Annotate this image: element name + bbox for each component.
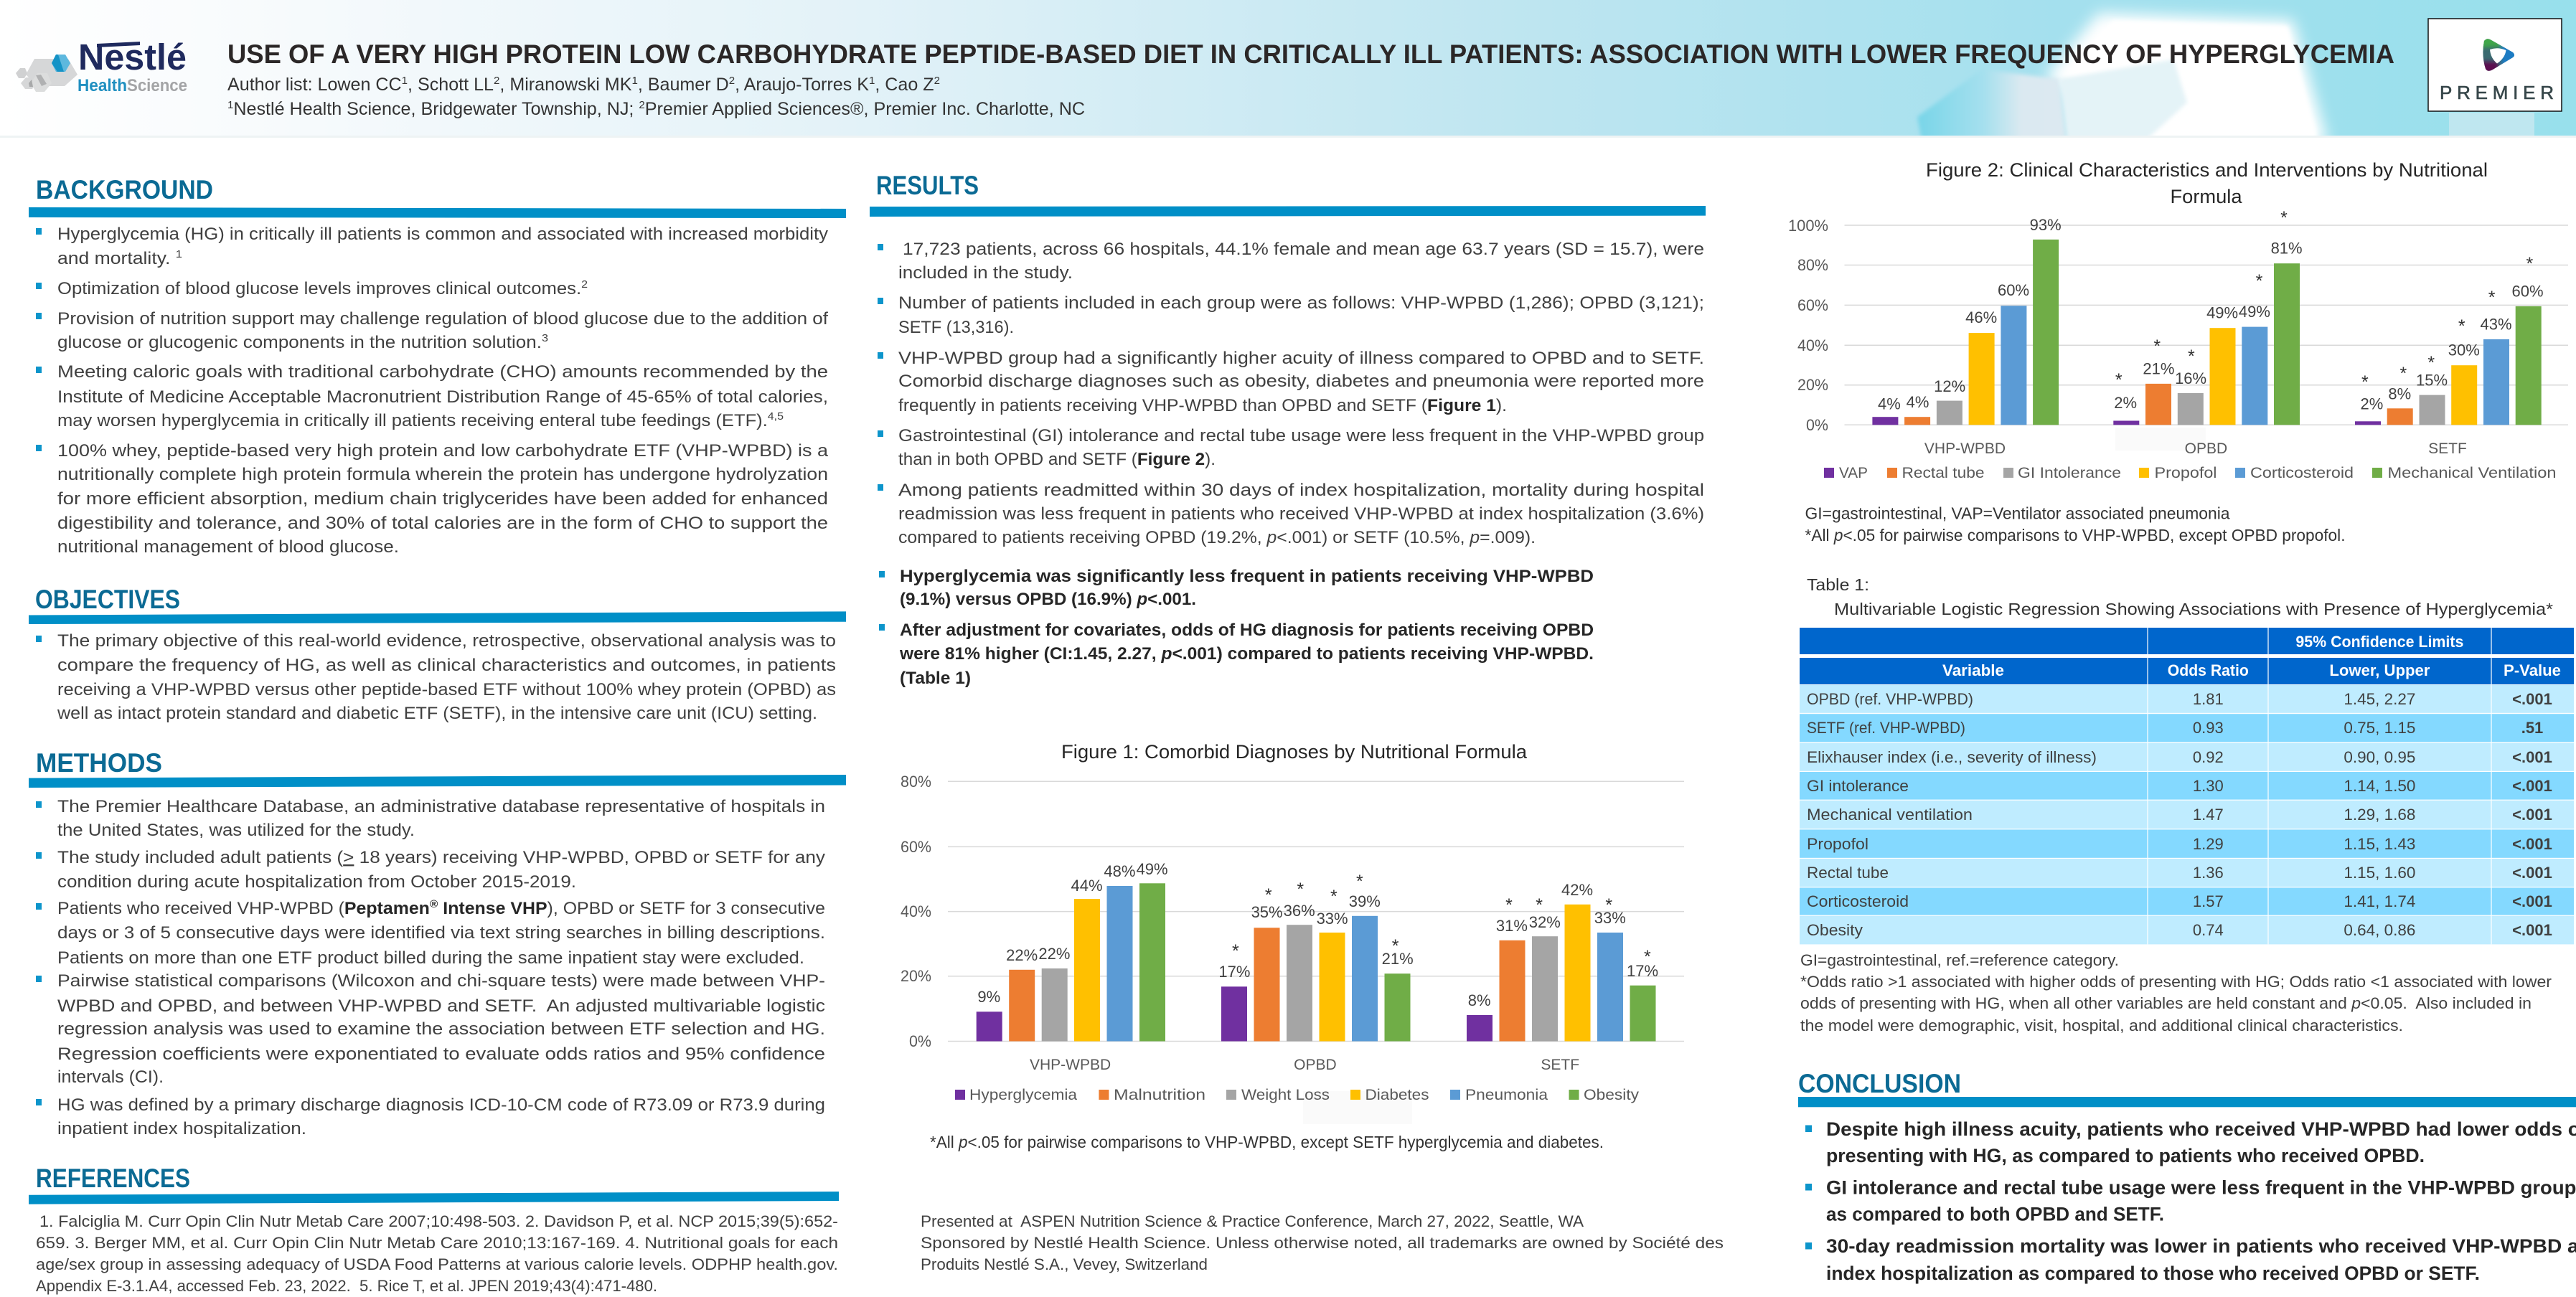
y axis labels [1788,217,1828,434]
conclusion bullet list: as compared to both OPBD and SETF. [1826,1204,2164,1225]
results bullet list: Gastrointestinal (GI) intolerance and rectal tube usage were less frequent in the VHP-WPBD group [898,426,1704,445]
table footnote [1800,951,2552,1034]
background bullet list: Optimization of blood glucose levels improves clinical outcomes. [57,279,547,298]
row: Elixhauser index [1807,748,2552,766]
significance asterisks: * [2458,316,2465,336]
row: Rectal tube: <.001 [2512,864,2552,882]
data labels: 22% [1038,945,1070,963]
data labels: 2% [2361,395,2383,413]
row: SETF: 0.75, 1.15 [2344,719,2415,737]
y axis labels: 20% [1797,376,1828,394]
row: OPBD: <.001 [2512,690,2552,708]
row: Rectal tube: Rectal tube [1807,864,1889,882]
reference list [36,1212,838,1295]
significance asterisks: * [1297,879,1304,900]
row: Mechanical ventilation: Mechanical ventilation [1807,806,1973,824]
author list: , Miranowski MK [499,75,632,95]
data labels: 60% [1998,281,2029,299]
row: OPBD: OPBD (ref. VHP-WPBD) [1807,690,1973,708]
legend: Mechanical Ventilation [2388,465,2556,481]
methods bullet list: ® [430,898,438,910]
background bullet list: 3 [542,332,548,344]
table header: P-Value [2504,661,2561,679]
data labels: 48% [1104,862,1135,880]
background bullet list: and mortality. [57,249,159,268]
bars: OPBD [1221,916,1411,1042]
objectives text: well as intact protein standard and diabetic ETF (SETF), in the intensive care unit (ICU) setting. [57,704,817,723]
y axis labels: 40% [901,902,931,920]
key findings: Hyperglycemia was significantly less frequent in patients receiving VHP-WPBD [900,567,1594,586]
methods bullet list: days or 3 of 5 consecutive days were identified via text string searches in billing descriptions. [57,923,825,943]
significance asterisks: * [1232,941,1239,961]
chart title: figure 1: Figure 1: Comorbid Diagnoses by Nutritional Formula [1061,741,1528,763]
methods bullet list [36,797,825,1138]
y axis labels: 0% [1806,416,1828,434]
row: Corticosteroid [1807,892,2552,910]
table 1: logistic regression [1800,628,2574,944]
row: Propofol: 1.15, 1.43 [2344,835,2415,853]
significance asterisks: * [2115,370,2123,390]
conclusion bullet list: presenting with HG, as compared to patients who received OPBD. [1826,1145,2425,1166]
table header: Variable [1942,661,2004,679]
legend: Obesity [1584,1087,1640,1103]
affiliations: Nestlé Health Science, Bridgewater Township, NJ; [233,99,639,119]
significance asterisks [2115,208,2534,392]
data labels: 35% [1251,903,1283,921]
y axis labels: 60% [901,838,931,856]
results bullet list: SETF (13,316). [898,318,1014,337]
objectives text: compare the frequency of HG, as well as clinical characteristics and outcomes, in patients [57,656,836,675]
table footnote: *Odds ratio >1 associated with higher odds of presenting with HG; Odds ratio <1 associated with lower [1800,973,2552,991]
results bullet list: included in the study. [898,263,1073,283]
background bullet list: 1 [176,248,182,260]
results bullet list: Number of patients included in each group were as follows: VHP-WPBD (1,286); OPBD (3,121); [898,293,1704,313]
row: OPBD: 1.81 [2193,690,2224,708]
presentation note [921,1212,1724,1273]
significance asterisks: * [1265,885,1272,905]
panel: methods [29,748,846,1138]
data labels: 16% [2175,369,2206,387]
table rows background [1800,685,2574,944]
panel: objectives [29,585,846,723]
row: Propofol: 1.29 [2193,835,2224,853]
methods bullet list: HG was defined by a primary discharge diagnosis ICD-10-CM code of R73.09 or R73.9 during [57,1095,825,1115]
objectives text: The primary objective of this real-world evidence, retrospective, observational analysis was to [57,631,836,651]
methods bullet list: the United States, was utilized for the study. [57,821,415,840]
table title: Multivariable Logistic Regression Showing Associations with Presence of Hyperglycemia* [1834,600,2553,618]
row: Corticosteroid: 1.41, 1.74 [2344,892,2415,910]
data labels: 36% [1284,902,1315,920]
significance asterisks: * [1505,895,1513,915]
background bullet list: nutritional management of blood glucose. [57,537,399,557]
background bullet list: Provision of nutrition support may challenge regulation of blood glucose due to the addition of [57,309,828,329]
row: Mechanical ventilation: 1.47 [2193,806,2224,824]
data labels: 46% [1965,308,1997,326]
data labels: 15% [2416,372,2448,389]
results bullet list: compared to patients receiving OPBD (19.2%, p<.001) or SETF (10.5%, p=.009). [898,528,1536,547]
legend: VAP [1839,465,1868,481]
methods bullet list: Intense VHP [438,899,547,918]
conclusion bullet list: 30-day readmission mortality was lower in patients who received VHP-WPBD at [1826,1235,2576,1257]
chart title: figure 2 [1926,159,2488,207]
significance asterisks: * [2153,336,2161,357]
reference list: 659. 3. Berger MM, et al. Curr Opin Clin Nutr Metab Care 2010;13:167-169. 4. Nutritional goals for each [36,1234,838,1252]
legend: GI Intolerance [2018,465,2121,481]
row: Obesity: 0.64, 0.86 [2344,921,2415,939]
key findings: After adjustment for covariates, odds of HG diagnosis for patients receiving OPBD [900,621,1594,640]
methods bullet list: regression analysis was used to examine the association between ETF selection and HG. [57,1019,825,1039]
data labels: 49% [1137,860,1168,878]
y axis labels: 80% [1797,256,1828,274]
row: Elixhauser index: 0.90, 0.95 [2344,748,2415,766]
presentation note: Sponsored by Nestlé Health Science. Unless otherwise noted, all trademarks are owned by Société des [921,1234,1724,1252]
reference list: 1. Falciglia M. Curr Opin Clin Nutr Metab Care 2007;10:498-503. 2. Davidson P, et al. NCP 2015;39(5):652- [39,1212,838,1230]
data labels: 33% [1317,910,1348,928]
logo: Premier: PREMIER [2440,82,2554,103]
data labels: 49% [2239,303,2270,321]
significance asterisks: * [2400,364,2407,384]
x axis labels: VHP-WPBD [1924,440,2006,457]
author list: , Araujo-Torres K [735,75,869,95]
key findings: (9.1%) versus OPBD (16.9%) p<.001. [900,590,1196,609]
logo: Nestle Health Science: Nestlé [78,37,187,77]
row: Propofol: <.001 [2512,835,2552,853]
data labels: 49% [2206,304,2238,321]
methods bullet list: The Premier Healthcare Database, an administrative database representative of hospitals in [57,797,825,816]
bar chart: figure 1 [901,773,1684,1124]
heading: objectives: OBJECTIVES [35,585,180,614]
methods bullet list: Pairwise statistical comparisons (Wilcoxon and chi-square tests) were made between VHP- [57,971,825,991]
data labels [977,860,1658,1009]
heading: results: RESULTS [876,171,979,200]
methods bullet list: Regression coefficients were exponentiated to evaluate odds ratios and 95% confidence [57,1044,825,1064]
background bullet list: glucose or glucogenic components in the nutrition solution. [57,333,504,352]
table footnote: odds of presenting with HG, when all other variables are held constant and p<0.05. Also included in [1800,994,2532,1012]
row: Mechanical ventilation [1807,806,2552,824]
data labels: 32% [1529,913,1561,931]
row: Propofol: Propofol [1807,835,1868,853]
data labels: 8% [2388,385,2411,403]
row: OPBD: 1.45, 2.27 [2344,690,2415,708]
bars: VHP-WPBD [1872,240,2059,425]
results bullet list: Among patients readmitted within 30 days of index hospitalization, mortality during hospital [898,481,1704,500]
results bullet list: frequently in patients receiving VHP-WPBD than OPBD and SETF ( Figure 1). [898,396,1507,415]
table header [1800,628,2574,684]
presentation note: Produits Nestlé S.A., Vevey, Switzerland [921,1255,1208,1273]
table title: Table 1: [1807,575,1869,594]
row: Rectal tube: 1.15, 1.60 [2344,864,2415,882]
data labels: 17% [1627,962,1658,980]
background bullet list: 4,5 [768,410,784,423]
panel: conclusion [1798,1069,2576,1284]
significance asterisks: * [2526,254,2534,274]
row: Elixhauser index: Elixhauser index (i.e., severity of illness) [1807,748,2097,766]
data labels: 60% [2511,283,2544,300]
author list: Author list: Lowen CC [227,75,401,95]
heading: methods: METHODS [36,748,162,778]
row: OPBD [1807,690,2552,708]
row: SETF: .51 [2521,719,2543,737]
objectives text: receiving a VHP-WPBD versus other peptide-based ETF without 100% whey protein (OPBD) as [57,680,836,699]
logo: Nestle Health Science [16,37,187,95]
key findings [879,567,1594,688]
data labels: 44% [1071,877,1103,895]
background bullet list [36,225,829,557]
legend: Diabetes [1365,1087,1429,1103]
y axis labels: 60% [1797,296,1828,314]
methods bullet list: The study included adult patients ( > 18 years) receiving VHP-WPBD, OPBD or SETF for any [57,848,825,867]
data labels: 93% [2030,216,2062,234]
background bullet list: Meeting caloric goals with traditional carbohydrate (CHO) amounts recommended by the [57,362,828,382]
figure 2 footnote: *All p<.05 for pairwise comparisons to VHP-WPBD, except OPBD propofol. [1805,526,2345,544]
data labels: 4% [1907,393,1929,411]
figure 2 footnote [1805,504,2345,544]
data labels: 42% [1561,881,1593,899]
reference list: Appendix E-3.1.A4, accessed Feb. 23, 2022. 5. Rice T, et al. JPEN 2019;43(4):471-480. [36,1277,657,1295]
legend: Rectal tube [1902,465,1985,481]
data labels: 2% [2114,394,2137,412]
row: GI intolerance [1807,777,2552,795]
y axis labels [901,773,931,1050]
author list: 2 [934,75,940,87]
data labels: 81% [2271,240,2303,257]
significance asterisks: * [1536,895,1543,915]
data labels: 22% [1006,946,1038,964]
row: Corticosteroid: 1.57 [2193,892,2224,910]
methods bullet list: inpatient index hospitalization. [57,1119,306,1138]
results bullet list: Comorbid discharge diagnoses such as obesity, diabetes and pneumonia were reported more [898,372,1704,391]
methods bullet list: condition during acute hospitalization from October 2015-2019. [57,872,576,892]
data labels: 31% [1496,917,1528,935]
chart title: figure 2: Figure 2: Clinical Characteristics and Interventions by Nutritional [1926,159,2488,181]
y axis labels: 100% [1788,217,1828,235]
data labels: 43% [2480,316,2512,333]
background bullet list: Institute of Medicine Acceptable Macronutrient Distribution Range of 45-65% of total calories, [57,387,828,407]
row: SETF: SETF (ref. VHP-WPBD) [1807,719,1965,737]
figure 2 footnote: GI=gastrointestinal, VAP=Ventilator associated pneumonia [1805,504,2230,522]
row: GI intolerance: GI intolerance [1807,777,1909,795]
title: USE OF A VERY HIGH PROTEIN LOW CARBOHYDRATE PEPTIDE-BASED DIET IN CRITICALLY ILL PATIENTS: ASSOCIATION WITH LOWER FREQUENCY OF HYPERGLYCEMIA [227,39,2394,69]
table footnote: the model were demographic, visit, hospital, and additional clinical characteristics. [1800,1017,2403,1034]
panel: background [29,175,846,557]
legend: Pneumonia [1465,1087,1548,1103]
data labels: 17% [1218,963,1250,981]
data labels: 33% [1594,909,1626,927]
logo: Nestle Health Science: Science [127,76,187,95]
x axis labels: OPBD [1294,1057,1337,1073]
row: Obesity [1807,921,2552,939]
heading: conclusion: CONCLUSION [1798,1069,1961,1098]
legend: Propofol [2154,465,2217,481]
figure 1 footnote: *All p<.05 for pairwise comparisons to VHP-WPBD, except SETF hyperglycemia and diabetes. [930,1133,1604,1151]
significance asterisks: * [1644,947,1651,967]
table footnote: GI=gastrointestinal, ref.=reference category. [1800,951,2119,969]
bars: VHP-WPBD [977,883,1165,1042]
significance asterisks: * [1392,936,1399,956]
methods bullet list: ), OPBD or SETF for 3 consecutive [547,899,815,918]
y axis labels: 40% [1797,336,1828,354]
row: GI intolerance: 1.30 [2193,777,2224,795]
author list: 2 [729,75,735,87]
y axis labels: 20% [901,967,931,985]
y axis labels: 0% [909,1032,931,1050]
row: GI intolerance: 1.14, 1.50 [2344,777,2415,795]
significance asterisks: * [2488,288,2496,308]
x axis labels [1924,440,2467,457]
data labels: 9% [977,988,1000,1006]
author list: 1 [402,75,408,87]
key findings: (Table 1) [900,669,971,688]
heading: references: REFERENCES [36,1164,190,1193]
row: Mechanical ventilation: <.001 [2512,806,2552,824]
conclusion bullet list [1805,1118,2576,1284]
significance asterisks: * [2427,353,2435,373]
significance asterisks: * [1605,895,1612,915]
conclusion bullet list: index hospitalization as compared to those who received OPBD or SETF. [1826,1263,2480,1284]
legend: Corticosteroid [2250,465,2354,481]
data labels: 8% [1468,991,1491,1009]
row: Corticosteroid: <.001 [2512,892,2552,910]
affiliations: 2 [639,99,645,111]
author list: 2 [494,75,499,87]
reference list: age/sex group in assessing adequacy of USDA Food Patterns at various calorie levels. ODPHP health.gov. [36,1255,838,1273]
background bullet list: 100% whey, peptide-based very high protein and low carbohydrate ETF (VHP-WPBD) is a [57,441,829,461]
legend [1824,465,2556,481]
bars: OPBD [2113,263,2300,425]
row: Elixhauser index: <.001 [2512,748,2552,766]
legend [955,1087,1640,1103]
background bullet list: nutritionally complete high protein formula wherein the protein has undergone hydrolyzation [57,465,828,484]
row: Rectal tube: 1.36 [2193,864,2224,882]
significance asterisks [1232,872,1651,967]
data labels: 12% [1934,377,1965,395]
background bullet list: 2 [581,278,588,291]
methods bullet list: Patients on more than one ETF product billed during the same inpatient stay were excluded. [57,948,804,968]
chart title: figure 2: Formula [2170,186,2242,207]
logo: Premier [2428,19,2562,111]
x axis labels [1030,1057,1579,1073]
bars: SETF [2355,306,2542,425]
row: Propofol [1807,835,2552,853]
legend: Malnutrition [1114,1087,1205,1103]
methods bullet list: Patients who received VHP-WPBD ( Peptamen [57,899,427,918]
conclusion bullet list: Despite high illness acuity, patients who received VHP-WPBD had lower odds of [1826,1118,2576,1140]
x axis labels: SETF [1541,1057,1579,1073]
data labels: 30% [2448,341,2480,359]
author list: 1 [631,75,638,87]
significance asterisks: * [2188,346,2195,367]
affiliations: Premier Applied Sciences®, Premier Inc. Charlotte, NC [645,99,1085,119]
affiliations: 1 [227,99,233,111]
bars: SETF [1467,905,1656,1042]
data labels: 21% [1382,950,1414,968]
key findings: were 81% higher (CI:1.45, 2.27, p<.001) compared to patients receiving VHP-WPBD. [899,644,1594,664]
background bullet list: Hyperglycemia (HG) in critically ill patients is common and associated with increased morbidity [57,225,828,244]
x axis labels: OPBD [2185,440,2227,457]
table header: Lower, Upper [2329,661,2430,679]
x axis labels: SETF [2428,440,2467,457]
author list: 1 [869,75,875,87]
conclusion bullet list: GI intolerance and rectal tube usage were less frequent in the VHP-WPBD group, [1826,1176,2576,1198]
y axis labels: 80% [901,773,931,791]
row: SETF: 0.93 [2193,719,2224,737]
results bullet list: readmission was less frequent in patients who received VHP-WPBD at index hospitalization (3.6%) [898,504,1704,524]
results bullet list: 17,723 patients, across 66 hospitals, 44.1% female and mean age 63.7 years (SD = 15.7), were [903,240,1704,259]
row: Obesity: Obesity [1807,921,1863,939]
logo: Nestle Health Science: Health [77,76,127,95]
significance asterisks: * [2361,372,2369,392]
x axis labels: VHP-WPBD [1030,1057,1111,1073]
row: Obesity: 0.74 [2193,921,2224,939]
panel: references [29,1164,839,1295]
heading: background: BACKGROUND [36,175,213,204]
background bullet list: may worsen hyperglycemia in critically ill patients receiving enteral tube feedings (ETF). [57,411,725,430]
table header: Odds Ratio [2168,661,2249,679]
significance asterisks: * [2280,208,2288,228]
background bullet list: for more efficient absorption, medium chain triglycerides have been added for enhanced [57,489,828,509]
row: GI intolerance: <.001 [2512,777,2552,795]
table header: 95% Confidence Limits [2295,633,2463,651]
objectives text [36,631,836,723]
bar chart: figure 2 [1788,208,2568,481]
background bullet list: digestibility and tolerance, and 30% of total calories are in the form of CHO to support the [57,514,828,533]
data labels: 4% [1878,395,1901,413]
row: Corticosteroid: Corticosteroid [1807,892,1909,910]
panel: results [870,171,1706,688]
presentation note: Presented at ASPEN Nutrition Science & Practice Conference, March 27, 2022, Seattle, WA [921,1212,1584,1230]
significance asterisks: * [2256,271,2263,291]
data labels: 39% [1349,892,1381,910]
row: Elixhauser index: 0.92 [2193,748,2224,766]
author list: , Baumer D [638,75,729,95]
row: Rectal tube [1807,864,2552,882]
row: Mechanical ventilation: 1.29, 1.68 [2344,806,2415,824]
legend: Weight Loss [1241,1087,1330,1103]
results bullet list: VHP-WPBD group had a significantly higher acuity of illness compared to OPBD and to SETF. [898,349,1704,368]
data labels [1878,216,2544,413]
methods bullet list: intervals (CI). [57,1067,164,1087]
results bullet list [878,240,1704,547]
results bullet list: than in both OPBD and SETF (Figure 2). [898,450,1216,469]
author list: , Cao Z [875,75,934,95]
table title [1807,575,2553,618]
header banner background [0,0,2576,143]
row: SETF [1807,719,2543,737]
data labels: 21% [2143,360,2174,377]
row: Obesity: <.001 [2512,921,2552,939]
significance asterisks: * [1330,887,1338,907]
significance asterisks: * [1356,872,1363,892]
legend: Hyperglycemia [969,1087,1077,1103]
methods bullet list: WPBD and OPBD, and between VHP-WPBD and SETF. An adjusted multivariable logistic [57,996,825,1016]
author list: , Schott LL [408,75,494,95]
